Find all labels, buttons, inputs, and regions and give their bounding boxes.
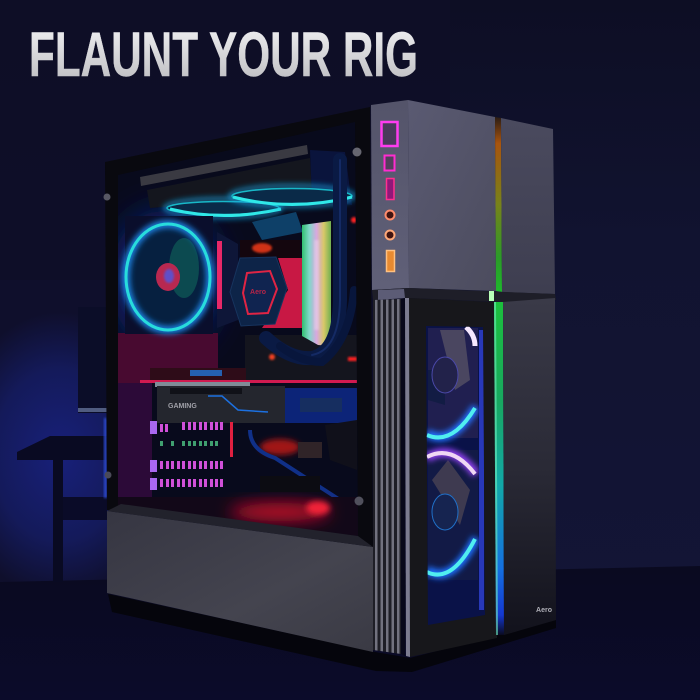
io: reset button: [384, 156, 394, 170]
shroud top rim: [107, 504, 373, 547]
vented fins: [373, 298, 405, 656]
io: audio jack: [386, 210, 394, 220]
expansion slot lights: [150, 421, 223, 490]
top front right panel: [501, 118, 555, 294]
CPU cooler fan frame: [125, 216, 213, 334]
red card bar: [230, 422, 233, 457]
red floor reflection: [118, 497, 358, 536]
RGB vertical strip: [494, 302, 504, 635]
front door frame: [408, 298, 497, 657]
top light slit: [495, 117, 502, 292]
brand logo: Aero: [536, 607, 552, 614]
front door edge highlight: [405, 298, 410, 657]
motherboard LEDs: [269, 217, 357, 361]
window side edge glow: [479, 330, 484, 610]
top front bevel with IO panel: [371, 100, 409, 290]
io: mic jack: [386, 230, 394, 240]
top fan ring left: [165, 199, 281, 217]
title: FLAUNT YOUR RIG: [29, 20, 418, 90]
pump block hexagon: [230, 257, 287, 326]
desk silhouette: [17, 307, 107, 582]
lower fan: [427, 450, 478, 580]
io: usb port: [386, 178, 394, 200]
sleeved liquid tubes: [266, 160, 354, 362]
glass thumb screws: [104, 148, 364, 506]
lower right front panel: [503, 298, 556, 635]
io: power button: [382, 122, 398, 146]
motherboard maroon area: [118, 333, 218, 383]
divider band: [372, 288, 556, 302]
fan hub: [156, 263, 180, 291]
red heat sink strip: [217, 232, 238, 328]
interior of the case: [110, 120, 358, 540]
top front left panel: [408, 100, 496, 291]
lower front shroud: [107, 511, 373, 652]
VRM cover and red glow behind pump: [240, 212, 304, 328]
left glass side panel: [104, 107, 373, 547]
pump block hexagon: Aero: [250, 289, 266, 296]
graphics card: [140, 380, 358, 423]
RGB memory modules: [302, 221, 331, 346]
motherboard red LEDs and cable: [250, 420, 357, 500]
io: max button: [386, 250, 394, 272]
upper fan: [427, 327, 478, 438]
case base shadow and feet: [108, 594, 556, 672]
top fan ring right: [230, 186, 354, 206]
front fan window: [426, 326, 485, 625]
radiator top: [140, 145, 352, 208]
graphics card: GAMING: [168, 403, 197, 410]
